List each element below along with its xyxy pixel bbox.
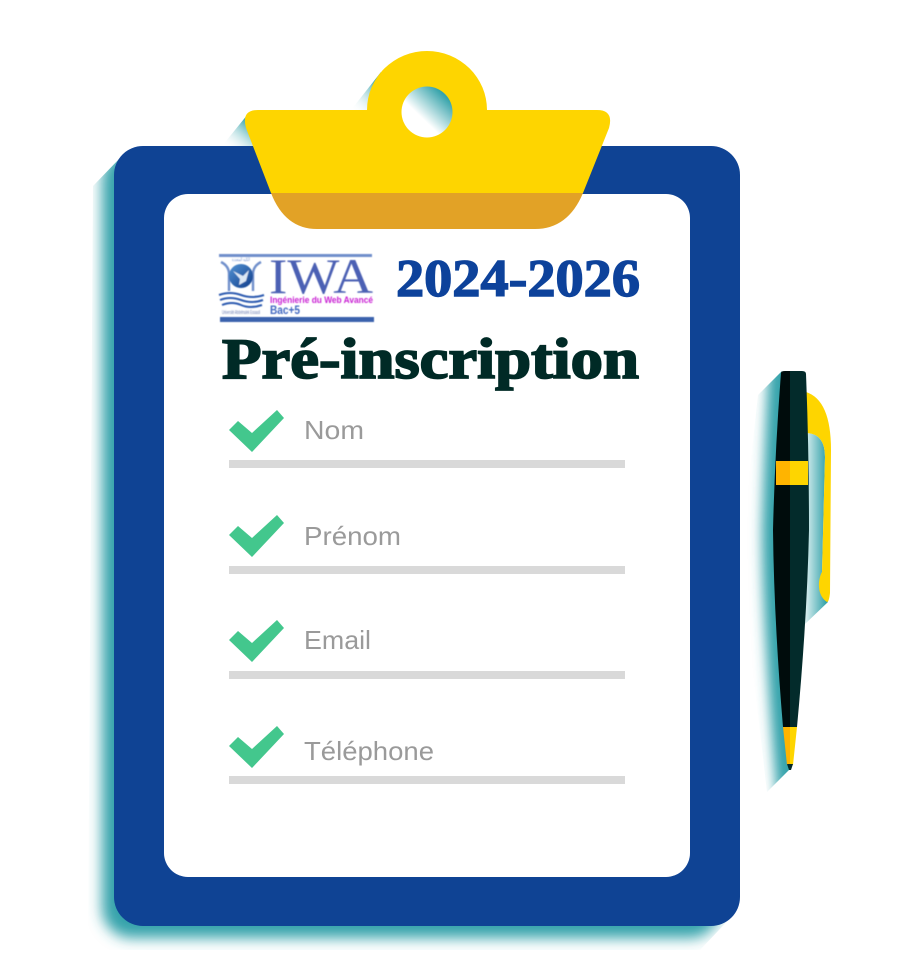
clipboard board	[114, 146, 740, 926]
clip shadow	[222, 72, 381, 146]
IWA logo	[219, 248, 374, 322]
IWA logo: الكلية المتعددة	[232, 257, 250, 263]
pen tip	[783, 727, 790, 765]
field: Téléphone	[229, 726, 625, 784]
field: Nom	[229, 410, 625, 468]
icon: check mark	[229, 515, 284, 557]
IWA logo: Université Abdelmalek Essaadi	[222, 310, 260, 316]
year heading: 2024-2026	[396, 250, 640, 308]
field: Email	[229, 620, 625, 679]
icon: check mark	[229, 410, 284, 452]
label: Téléphone: Téléphone	[304, 736, 434, 766]
pen	[762, 340, 831, 810]
pen body	[773, 371, 790, 727]
icon: check mark	[229, 726, 284, 768]
paper sheet	[164, 194, 690, 877]
IWA logo: IWA	[269, 248, 373, 304]
label: Prénom: Prénom	[304, 521, 401, 551]
yellow clip	[245, 51, 610, 229]
clipboard board shadow	[102, 150, 720, 938]
pen shadow	[752, 371, 789, 792]
IWA logo: Ingénierie du Web Avancé	[270, 295, 373, 306]
label: Email: Email	[304, 625, 371, 655]
IWA logo: Bac+5	[270, 303, 300, 317]
field: Prénom	[229, 515, 625, 574]
pen band	[776, 461, 790, 485]
title: Pré-inscription	[222, 328, 639, 391]
pen clip	[806, 392, 831, 602]
clipboard infographic	[90, 51, 831, 950]
pen clip shadow	[805, 433, 828, 624]
icon: check mark	[229, 620, 284, 662]
label: Nom: Nom	[304, 415, 364, 445]
